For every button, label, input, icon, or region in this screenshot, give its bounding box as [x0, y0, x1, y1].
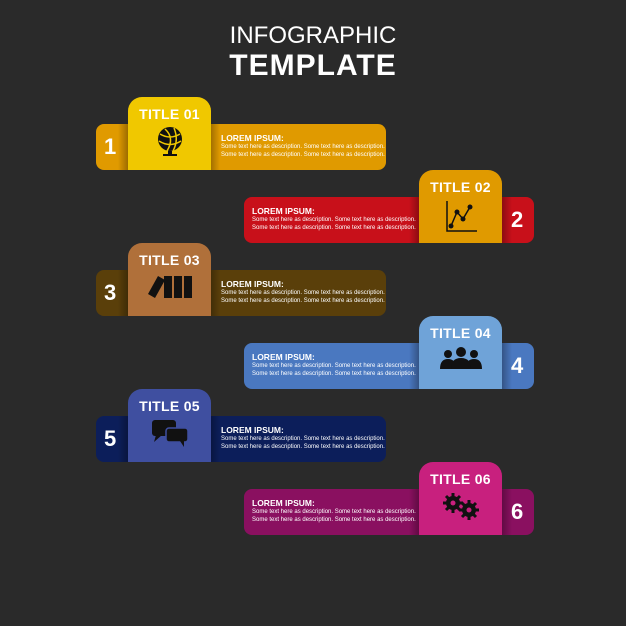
- row 1: Some text here as description. Some text here as description.: [221, 152, 385, 158]
- row 1: 1: [104, 134, 116, 159]
- tab 2 with chart icon: TITLE 02: [430, 179, 491, 195]
- tab 6 with gears icon: [419, 462, 502, 535]
- row 2: 2: [511, 207, 523, 232]
- tab 4 with people icon: [419, 316, 502, 389]
- row 1: LOREM IPSUM:: [221, 133, 284, 143]
- title: INFOGRAPHIC: [230, 22, 396, 49]
- tab 5 with chat icon: TITLE 05: [139, 398, 200, 414]
- tab 3 with binders icon: [128, 243, 211, 316]
- row 5: LOREM IPSUM:: [221, 425, 284, 435]
- row 5: [96, 389, 386, 462]
- row 4: Some text here as description. Some text here as description.: [252, 371, 416, 377]
- row 5: Some text here as description. Some text here as description.: [221, 436, 385, 442]
- row 3: Some text here as description. Some text here as description.: [221, 290, 385, 296]
- tab 1 with globe icon: TITLE 01: [139, 106, 200, 122]
- tab 6 with gears icon: TITLE 06: [430, 471, 491, 487]
- row 2: Some text here as description. Some text here as description.: [252, 225, 416, 231]
- row 3: LOREM IPSUM:: [221, 279, 284, 289]
- title: [229, 22, 397, 82]
- row 6: 6: [511, 499, 523, 524]
- row 3: Some text here as description. Some text here as description.: [221, 298, 385, 304]
- tab 5 with chat icon: [128, 389, 211, 462]
- row 6: Some text here as description. Some text here as description.: [252, 517, 416, 523]
- row 4: 4: [511, 353, 523, 378]
- tab 3 with binders icon: TITLE 03: [139, 252, 200, 268]
- row 2: LOREM IPSUM:: [252, 206, 315, 216]
- title: TEMPLATE: [229, 49, 397, 82]
- row 3: 3: [104, 280, 116, 305]
- row 1: [96, 97, 386, 170]
- row 3: [96, 243, 386, 316]
- row 4: LOREM IPSUM:: [252, 352, 315, 362]
- row 2: Some text here as description. Some text here as description.: [252, 217, 416, 223]
- row 6: LOREM IPSUM:: [252, 498, 315, 508]
- row 6: [244, 462, 534, 535]
- row 1: Some text here as description. Some text here as description.: [221, 144, 385, 150]
- row 5: 5: [104, 426, 116, 451]
- row 5: Some text here as description. Some text here as description.: [221, 444, 385, 450]
- tab 4 with people icon: TITLE 04: [430, 325, 491, 341]
- row 4: [244, 316, 534, 389]
- tab 1 with globe icon: [128, 97, 211, 170]
- row 6: Some text here as description. Some text here as description.: [252, 509, 416, 515]
- row 4: Some text here as description. Some text here as description.: [252, 363, 416, 369]
- tab 2 with chart icon: [419, 170, 502, 243]
- row 2: [244, 170, 534, 243]
